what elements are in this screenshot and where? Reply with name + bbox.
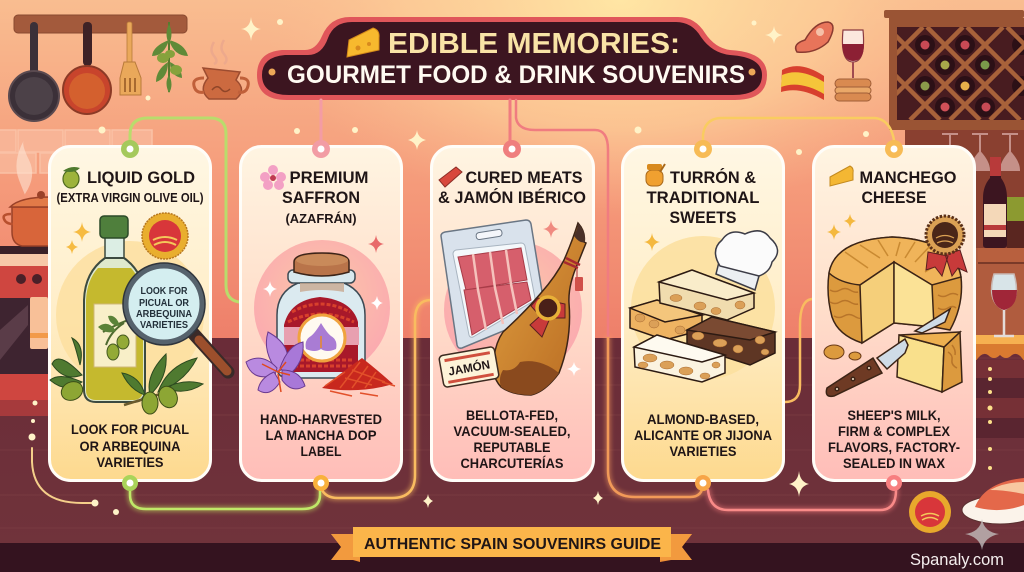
- title line 1: EDIBLE MEMORIES:: [388, 28, 680, 60]
- description: VARIETIES: [96, 454, 164, 470]
- heading: CURED MEATS: [466, 168, 582, 187]
- icon: knife: [826, 309, 950, 396]
- panel: premium saffron: [240, 146, 402, 480]
- panel: manchego cheese: [814, 146, 974, 480]
- connector nodes: [121, 140, 903, 491]
- icon: cheese wedge: [830, 166, 853, 186]
- description: ALMOND-BASED,: [647, 411, 759, 427]
- description: BELLOTA-FED,: [466, 407, 558, 423]
- icon: manchego wheel: [828, 237, 962, 343]
- description: SEALED IN WAX: [843, 455, 946, 471]
- sparkles: [543, 220, 559, 238]
- heading: MANCHEGO: [860, 168, 956, 187]
- magnifier text: ARBEQUINA: [136, 309, 192, 320]
- description: [71, 421, 189, 470]
- icon: jamón label: JAMÓN: [447, 356, 491, 379]
- icon: award seal: [926, 216, 967, 276]
- connector lines: [32, 100, 896, 510]
- icon: clay pot with steam: [194, 40, 248, 99]
- icon: stacked bread: [835, 79, 871, 101]
- icon: olive branches: [50, 338, 203, 414]
- icon: crumbs: [824, 345, 861, 360]
- icon: plate of ham: [962, 478, 1024, 524]
- wine rack and shelves, right: [884, 10, 1024, 470]
- icon: magnifying glass: [123, 263, 228, 372]
- icon: hanging olive branch: [152, 22, 188, 93]
- watermark star: [965, 519, 999, 550]
- icon: red wine glass: [842, 30, 864, 78]
- description: CHARCUTERÍAS: [460, 455, 564, 471]
- icon: wine glass: [992, 274, 1017, 336]
- wall tiles: [0, 130, 152, 173]
- icon: saffron jar: [263, 253, 383, 378]
- icon: cheese slice: [897, 332, 962, 392]
- description: HAND-HARVESTED: [260, 411, 382, 427]
- heading: CHEESE: [862, 188, 926, 207]
- icon: olive: [63, 167, 80, 188]
- title line 2: GOURMET FOOD & DRINK SOUVENIRS: [287, 61, 745, 89]
- ribbon text: AUTHENTIC SPAIN SOUVENIRS GUIDE: [364, 536, 661, 553]
- heading: SAFFRON: [282, 188, 360, 207]
- sparkles on background: [28, 17, 869, 515]
- kitchen stove and pot, left: [0, 140, 50, 416]
- magnifier text: VARIETIES: [140, 320, 188, 331]
- icon: vacuum package: [441, 220, 545, 348]
- magnifier text: LOOK FOR: [140, 286, 188, 297]
- heading: [860, 168, 956, 207]
- description: FIRM & COMPLEX: [838, 423, 951, 439]
- wooden floor: [0, 338, 1024, 572]
- icon: cheese: [347, 28, 379, 57]
- heading: [438, 168, 586, 207]
- description: OR ARBEQUINA: [80, 438, 180, 454]
- panel: turron and sweets: [622, 146, 784, 480]
- hanging pans and utensils rail: [9, 15, 248, 121]
- wall background: [0, 0, 1024, 340]
- sparkles: [368, 235, 384, 253]
- icon: olive oil bottle: [84, 216, 145, 402]
- icon: honey jar: [646, 164, 665, 186]
- icon: DOP seal, bottom: [909, 491, 951, 533]
- description: LABEL: [300, 443, 342, 459]
- sparkles: [827, 214, 856, 240]
- description: VACUUM-SEALED,: [454, 423, 570, 439]
- description: LOOK FOR PICUAL: [71, 421, 189, 437]
- heading: TURRÓN &: [670, 168, 756, 187]
- icon: Spanish flag: [781, 66, 824, 100]
- description: [260, 411, 382, 459]
- description: [828, 407, 960, 471]
- icon: nougat blocks: [630, 270, 775, 382]
- panel: cured meats: [432, 146, 594, 480]
- heading: SWEETS: [670, 208, 736, 227]
- icon: wine bottle: [983, 157, 1007, 248]
- description: SHEEP'S MILK,: [848, 407, 940, 423]
- icon: saffron flower: [260, 165, 286, 190]
- description: [634, 411, 772, 459]
- heading: LIQUID GOLD: [87, 168, 195, 187]
- description: LA MANCHA DOP: [266, 427, 376, 443]
- subheading: (EXTRA VIRGIN OLIVE OIL): [56, 190, 204, 205]
- description: VARIETIES: [670, 443, 736, 459]
- heading: [282, 168, 368, 207]
- sparkles: [644, 233, 660, 251]
- heading: PREMIUM: [290, 168, 368, 187]
- icon: bacon: [439, 167, 462, 187]
- subheading: (AZAFRÁN): [286, 211, 356, 226]
- icon: chef hat: [715, 231, 778, 290]
- description: [454, 407, 570, 471]
- panel: liquid gold: [50, 146, 228, 480]
- magnifier text: [136, 286, 192, 331]
- icon: jamón leg: [493, 223, 586, 395]
- guide ribbon: [331, 527, 692, 562]
- icon: meat steak: [796, 22, 833, 52]
- icon: crocus flower: [246, 332, 305, 393]
- heading: [646, 168, 760, 227]
- heading: TRADITIONAL: [646, 188, 760, 207]
- description: ALICANTE OR JIJONA: [634, 427, 772, 443]
- watermark: Spanaly.com: [910, 551, 1004, 569]
- magnifier text: PICUAL OR: [139, 298, 190, 309]
- title banner: [257, 17, 767, 100]
- icon: saffron threads: [322, 358, 395, 396]
- description: FLAVORS, FACTORY-: [828, 439, 960, 455]
- description: REPUTABLE: [474, 439, 550, 455]
- icon: DOP seal: [142, 213, 188, 259]
- heading: & JAMÓN IBÉRICO: [438, 188, 586, 207]
- sparkles: [66, 222, 91, 254]
- icon: jamón label: [439, 346, 499, 388]
